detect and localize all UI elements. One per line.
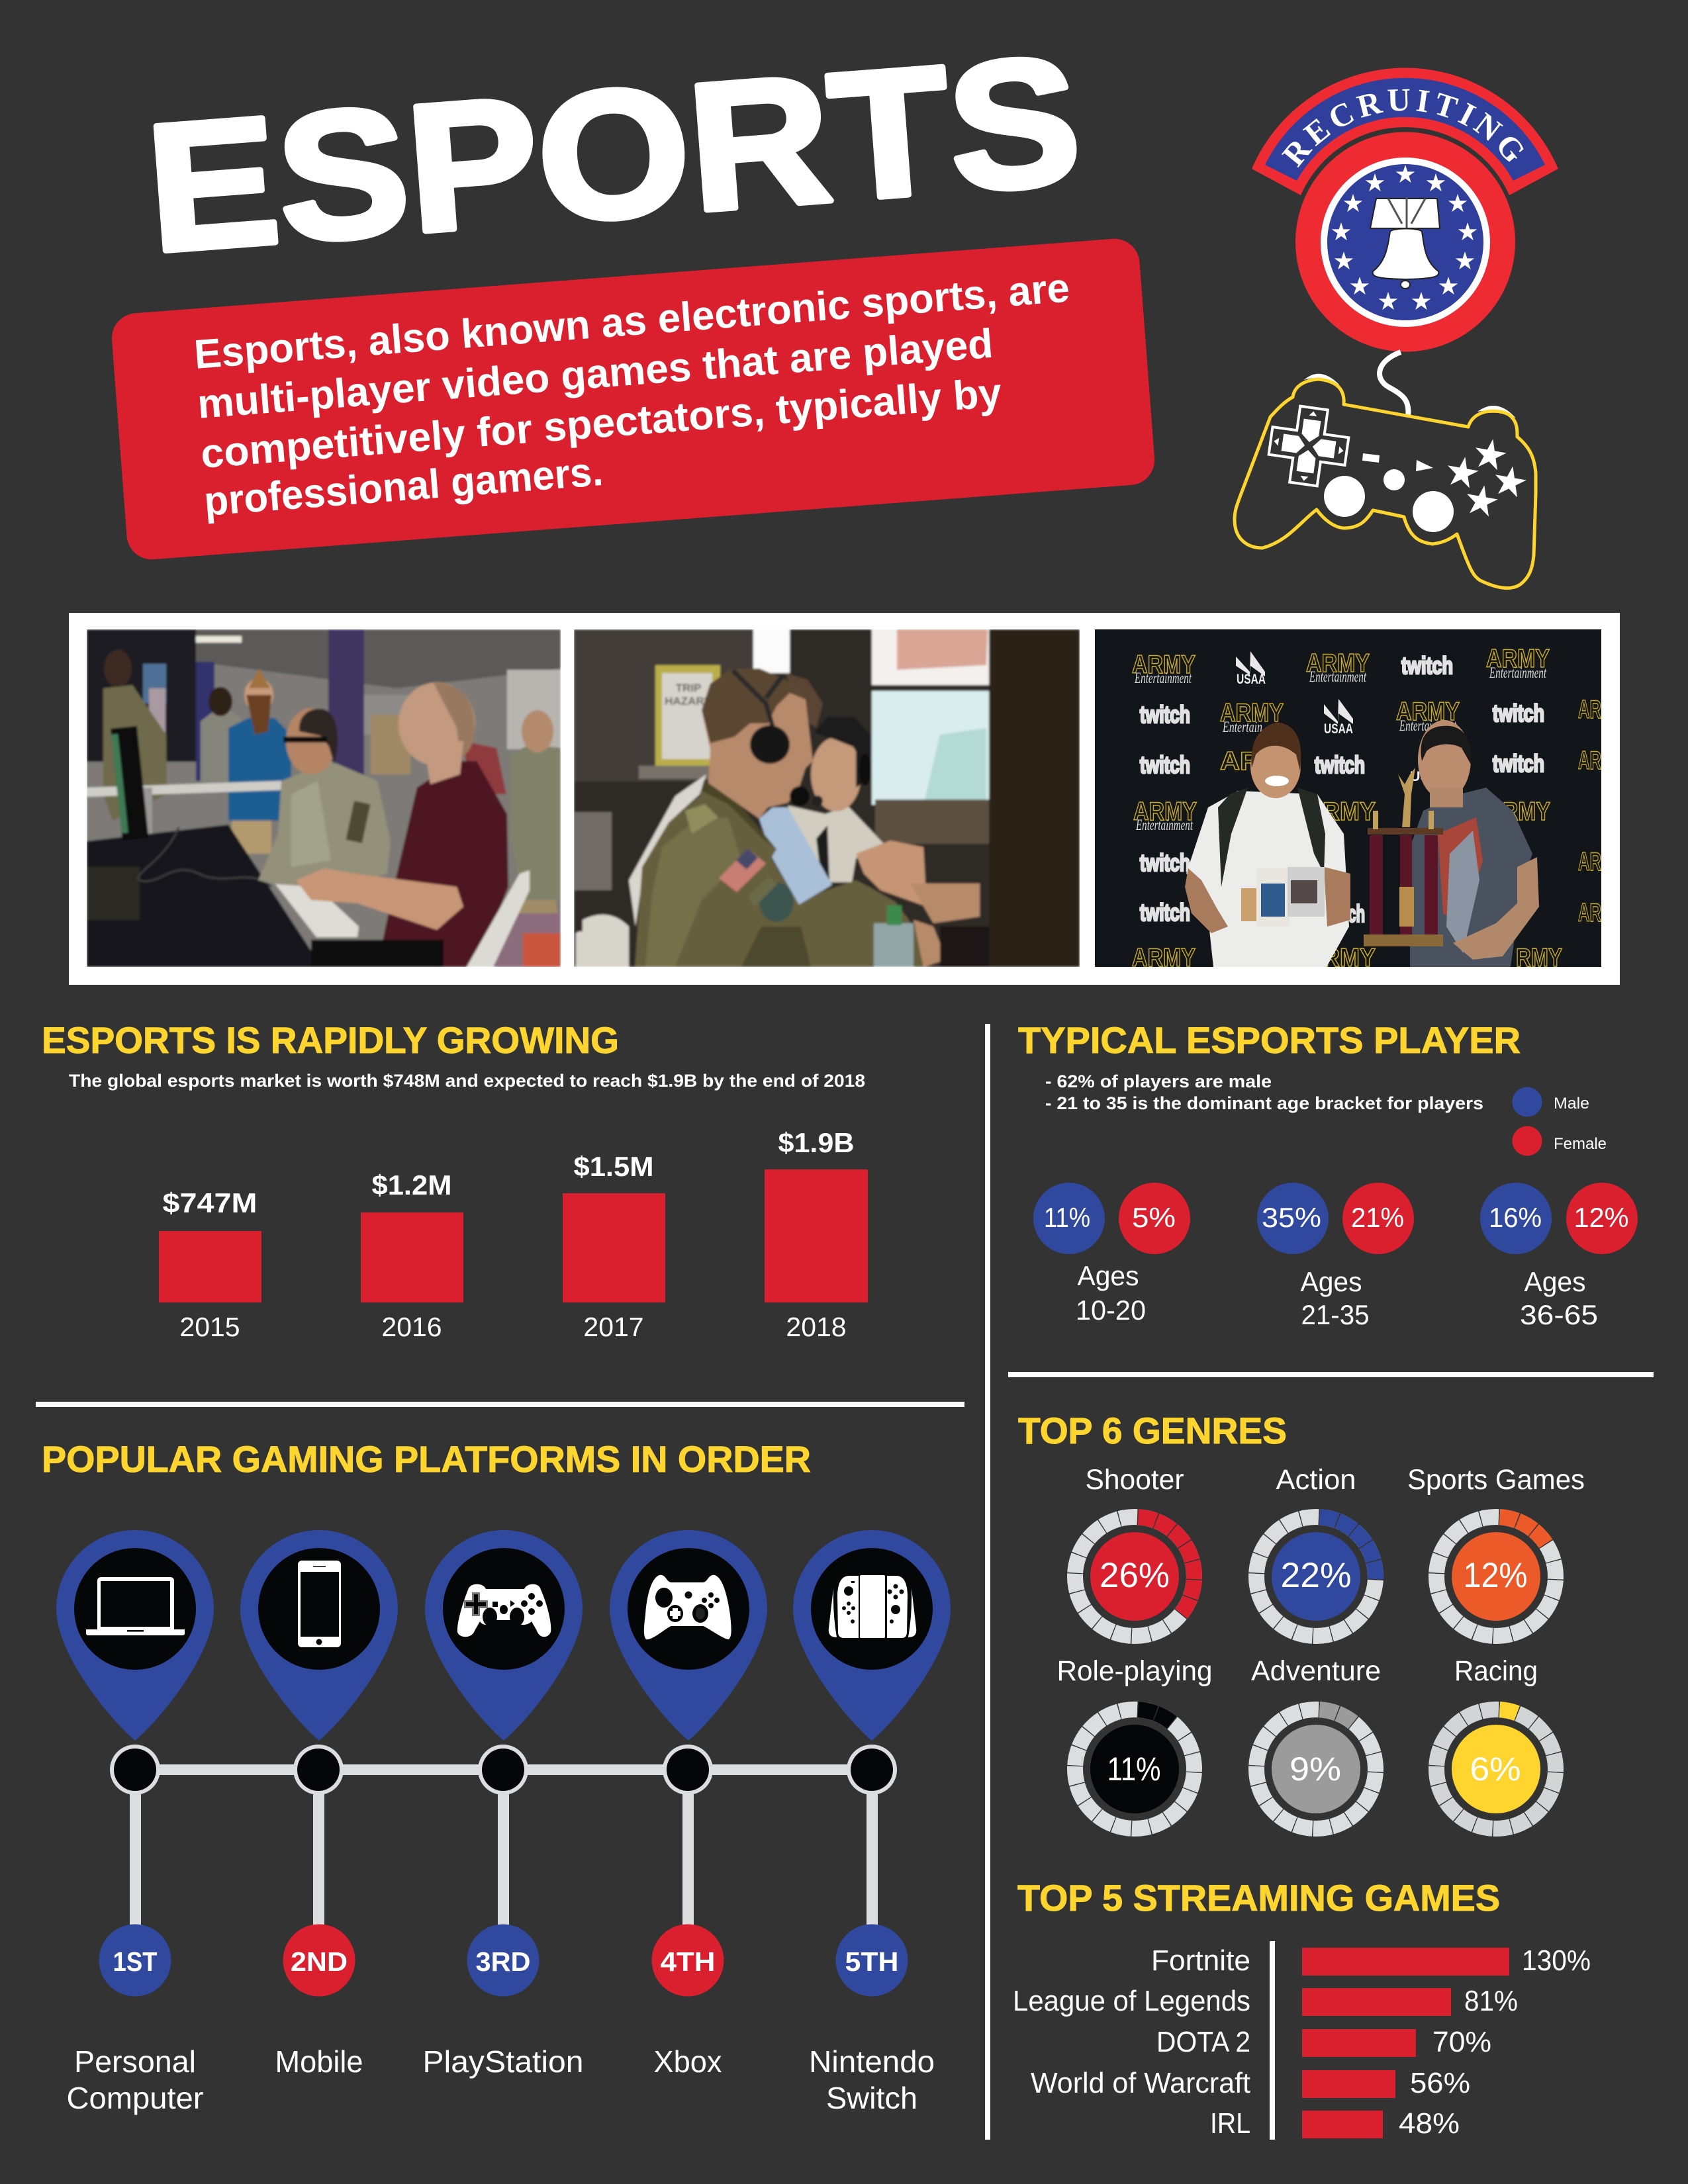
age group 21-35: Ages [1300, 1266, 1362, 1297]
backdrop logos: RMY [1516, 944, 1562, 972]
backdrop logos: ARMY [1132, 944, 1196, 972]
age group 36-65 [1480, 1183, 1638, 1330]
intro callout: multi-player video games that are played [196, 321, 995, 428]
platform 4: xbox [610, 1530, 767, 2079]
bar chart: streaming games: Fortnite [1151, 1944, 1250, 1977]
logo: recruiting emblem [1233, 68, 1558, 590]
platform 2: mobile: 2ND [291, 1946, 348, 1977]
main soldier [635, 781, 927, 967]
white stick box [275, 884, 359, 937]
icon: xbox controller [644, 1575, 731, 1639]
emblem circle [1295, 132, 1515, 352]
bar chart: market growth: 2016 [381, 1312, 442, 1342]
table [87, 825, 322, 967]
backdrop logos: AR [1578, 899, 1601, 927]
bar chart: streaming games: IRL [1210, 2107, 1250, 2140]
donut: adventure [1251, 1655, 1381, 1832]
backdrop logos: USAA [1237, 672, 1266, 687]
chair [467, 870, 530, 967]
donut: shooter: Shooter [1086, 1464, 1184, 1496]
donut: action: Action [1276, 1464, 1356, 1496]
legend: Female [1554, 1135, 1607, 1153]
photo: army commentators with headsets: HAZARD [665, 695, 712, 707]
age group 10-20: Ages [1078, 1260, 1139, 1291]
backdrop logos: twitch [1493, 750, 1544, 777]
backdrop logos: twitch [1493, 700, 1544, 727]
bar chart: streaming games: DOTA 2 [1156, 2026, 1250, 2058]
icon: playstation controller [457, 1584, 551, 1637]
d-pad [1265, 402, 1352, 490]
backdrop logos: Entertainment [1399, 717, 1456, 734]
platform 1: personal computer [56, 1530, 214, 2115]
backdrop logos: ARMY [1132, 651, 1196, 679]
icon: laptop [86, 1577, 185, 1635]
backdrop logos: ARMY [1486, 645, 1550, 673]
bar chart: streaming games: 56% [1410, 2067, 1470, 2099]
bar chart: market growth: $1.2M [372, 1169, 451, 1201]
bar chart: streaming games: 81% [1464, 1985, 1518, 2017]
bar chart: market growth: $747M [163, 1187, 257, 1218]
backdrop logos: twitch [1401, 652, 1453, 679]
backdrop logos: US [1410, 769, 1430, 784]
poster [655, 665, 720, 766]
maroon shirt player [377, 761, 508, 967]
donut: sports games: 12% [1463, 1556, 1528, 1595]
soldier head [703, 692, 814, 820]
intro callout [110, 237, 1156, 561]
backdrop logos: USAA [1324, 721, 1353, 737]
platform 2: mobile [240, 1530, 398, 2079]
donut: racing: 6% [1470, 1751, 1521, 1788]
backdrop logos: ARMY [1220, 699, 1284, 727]
donut: role-playing [1056, 1655, 1213, 1832]
heading: top 5 streaming games: TOP 5 STREAMING GAMES [1017, 1877, 1500, 1919]
photo: army commentators with headsets [574, 629, 1080, 967]
age group 21-35: 35% [1262, 1202, 1321, 1233]
platform 1: personal computer: Personal [74, 2044, 196, 2079]
donut: role-playing: Role-playing [1056, 1655, 1213, 1687]
platform 4: xbox: 4TH [661, 1946, 715, 1977]
age group 21-35: 21% [1351, 1202, 1404, 1233]
backdrop logos: twitch [1315, 751, 1365, 778]
bottle [874, 923, 914, 967]
platform 1: personal computer: Computer [66, 2081, 204, 2115]
age group 36-65: 12% [1574, 1202, 1628, 1233]
left winner [1186, 791, 1349, 967]
age group 10-20: 11% [1044, 1202, 1090, 1233]
backdrop logos: RMY [1323, 944, 1376, 972]
backdrop logos: ARMY [1133, 797, 1197, 826]
player facts: - 62% of players are male [1045, 1071, 1272, 1091]
backdrop logos: AR [1578, 696, 1601, 724]
photo: tournament winners [1095, 629, 1601, 972]
bar chart: market growth: $1.5M [573, 1151, 654, 1182]
platform 4: xbox: Xbox [654, 2044, 722, 2079]
bar chart: market growth: 2018 [786, 1312, 847, 1342]
backdrop logos: ARMY [1306, 649, 1370, 678]
donut: racing: Racing [1454, 1655, 1538, 1687]
age group 10-20 [1033, 1183, 1190, 1326]
platform 3: playstation: PlayStation [422, 2044, 584, 2079]
backdrop logos: AR [1578, 848, 1601, 876]
age group 10-20: 10-20 [1076, 1295, 1146, 1326]
hands [856, 841, 927, 907]
second commentator [788, 805, 885, 882]
platform 3: playstation: 3RD [475, 1946, 531, 1977]
platform 5: nintendo switch: Switch [826, 2081, 917, 2115]
pin 5 [793, 1530, 951, 1741]
timeline connectors [130, 1764, 878, 1926]
heading: top 6 genres: TOP 6 GENRES [1018, 1410, 1287, 1451]
icon: nintendo switch [829, 1575, 916, 1638]
recruiting tab [1252, 68, 1558, 195]
platform 5: nintendo switch: 5TH [845, 1946, 899, 1977]
curly hair behind [786, 673, 823, 728]
seated soldier [258, 761, 391, 887]
age group 36-65: 16% [1489, 1202, 1542, 1233]
backdrop logos: Entertainment [1489, 664, 1546, 681]
age group 10-20: 5% [1132, 1202, 1176, 1233]
legend: Male [1554, 1095, 1589, 1113]
donut: shooter: 26% [1100, 1556, 1170, 1595]
backdrop logos: twitch [1140, 899, 1190, 926]
backdrop logos [1132, 645, 1601, 972]
backdrop logos: Entertainment [1134, 670, 1192, 686]
photo: gamers at arcade sticks [87, 629, 561, 967]
player facts: - 21 to 35 is the dominant age bracket for players [1045, 1093, 1483, 1113]
backdrop logos: twitch [1140, 849, 1190, 876]
age group 36-65: Ages [1524, 1266, 1586, 1297]
subtitle: The global esports market is worth $748M and expected to reach $1.9B by the end of 2018 [69, 1071, 865, 1091]
heading: popular gaming platforms: POPULAR GAMING PLATFORMS IN ORDER [42, 1438, 811, 1480]
bar chart: streaming games: 48% [1399, 2107, 1460, 2140]
trophy [1364, 768, 1443, 946]
platform 1: personal computer: 1ST [113, 1946, 158, 1977]
donut: racing [1433, 1655, 1559, 1832]
bar chart: market growth [159, 1127, 868, 1342]
backdrop logos: AR [1220, 747, 1260, 776]
pin 2 [240, 1530, 398, 1741]
pin 1 [56, 1530, 214, 1741]
backdrop logos: Entertainment [1309, 668, 1366, 685]
player facts [1045, 1071, 1483, 1113]
donut: action [1253, 1464, 1379, 1639]
backdrop logos: Entertainment [1135, 817, 1193, 833]
donut: adventure: Adventure [1251, 1655, 1381, 1687]
bar chart: market growth: 2015 [179, 1312, 240, 1342]
donut: shooter [1072, 1464, 1197, 1639]
age group 21-35 [1257, 1183, 1414, 1330]
white-clad person behind soldier [629, 774, 706, 927]
platform 2: mobile: Mobile [275, 2044, 363, 2079]
chairs [576, 915, 629, 967]
toy boxes [1256, 868, 1289, 927]
intro callout: Esports, also known as electronic sports, are [193, 265, 1071, 378]
bar chart: streaming games: 130% [1522, 1944, 1591, 1977]
heading: esports is rapidly growing: ESPORTS IS RAPIDLY GROWING [42, 1019, 619, 1061]
donut: role-playing: 11% [1107, 1751, 1161, 1788]
bar chart: streaming games [1013, 1941, 1591, 2140]
right winner [1410, 788, 1532, 967]
bystanders [103, 685, 167, 821]
platform 5: nintendo switch: Nintendo [809, 2044, 935, 2079]
photo strip [69, 613, 1620, 985]
donut: adventure: 9% [1289, 1751, 1341, 1788]
recruiting tab: RECRUITING [1282, 89, 1524, 168]
USAA birds [1236, 651, 1353, 724]
intro callout: competitively for spectators, typically by [199, 370, 1004, 477]
backdrop logos: Entertain [1222, 719, 1262, 735]
backdrop logos: RMY [1503, 797, 1550, 826]
age group 36-65: 36-65 [1520, 1299, 1598, 1330]
intro callout: professional gamers. [203, 449, 604, 525]
bar chart: streaming games: 70% [1432, 2026, 1491, 2058]
donut: sports games [1407, 1464, 1585, 1639]
backdrop logos: witch [1327, 900, 1365, 927]
platform 5: nintendo switch [793, 1530, 951, 2115]
bar chart: market growth: 2017 [583, 1312, 644, 1342]
backdrop logos: ARMY [1396, 698, 1460, 726]
cable [1380, 352, 1409, 417]
bar chart: streaming games: League of Legends [1013, 1985, 1250, 2017]
title: ESPORTS [140, 19, 1086, 291]
backdrop logos: twitch [1140, 751, 1190, 778]
photo: army commentators with headsets: TRIP [676, 682, 701, 694]
icon: phone [298, 1561, 341, 1647]
heading: typical esports player: TYPICAL ESPORTS PLAYER [1018, 1019, 1521, 1061]
controller [1235, 374, 1536, 588]
donut: sports games: Sports Games [1407, 1464, 1585, 1496]
legend [1512, 1087, 1607, 1156]
backdrop logos: AR [1578, 747, 1601, 775]
age group 21-35: 21-35 [1301, 1299, 1369, 1330]
donut: action: 22% [1280, 1556, 1352, 1595]
backdrop logos: RMY [1323, 797, 1376, 826]
platform 3: playstation [422, 1530, 584, 2079]
bar chart: streaming games: World of Warcraft [1031, 2067, 1250, 2099]
pin 4 [610, 1530, 767, 1741]
standing soldier right [510, 745, 561, 900]
backdrop logos: twitch [1140, 701, 1190, 728]
bar chart: market growth: $1.9B [778, 1127, 854, 1158]
pin 3 [425, 1530, 583, 1741]
